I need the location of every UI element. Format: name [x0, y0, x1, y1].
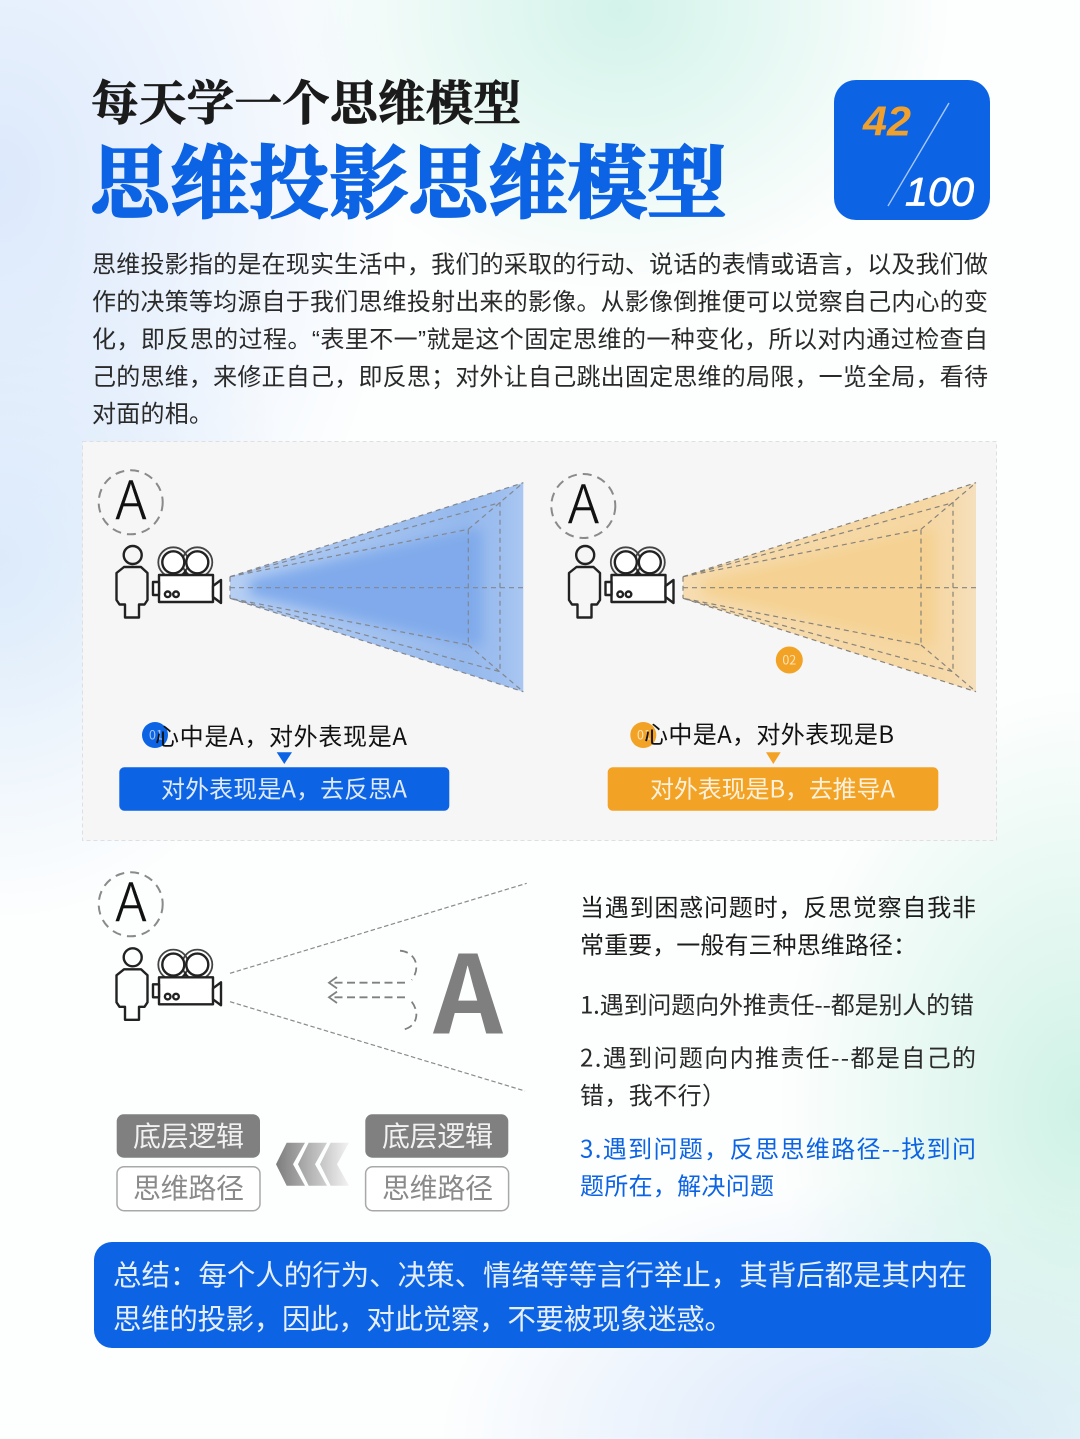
badge: 42 of 100 — [834, 80, 990, 220]
icon: person with camera right — [569, 546, 674, 618]
icon: person with camera left — [116, 546, 221, 618]
arrows: reflected back — [329, 951, 416, 1030]
icon: idea A bubble lower — [99, 861, 163, 937]
text block: introduction: 己的思维，来修正自己，即反思；对外让自己跳出固定思维的局限，一览全局，看待 — [92, 357, 988, 392]
chart: orange projection cone — [683, 483, 976, 692]
arrow: triple chevron — [276, 1143, 349, 1186]
caption: orange column: 01 — [637, 724, 651, 744]
tag group: left logic and path — [117, 1114, 260, 1211]
badge: 02: 02 — [782, 650, 796, 668]
badge: 02 — [776, 646, 803, 674]
panel: summary — [94, 1242, 991, 1348]
icon: idea A bubble right: A — [568, 463, 599, 539]
icon: idea A bubble left — [99, 459, 163, 535]
text block: three thinking paths: 题所在，解决问题 — [580, 1166, 774, 1202]
badge: 42 of 100: 100 — [905, 170, 974, 214]
callout: blue reflect A: 对外表现是A，去反思A — [161, 770, 407, 804]
tag group: right logic and path: 思维路径 — [382, 1167, 493, 1207]
diagram: reflecting back — [99, 861, 527, 1091]
arrow: orange down — [766, 752, 781, 764]
badge: 42 of 100: 42 — [862, 98, 911, 144]
panel: summary: 思维的投影，因此，对此觉察，不要被现象迷惑。 — [113, 1297, 733, 1338]
text block: three thinking paths: 3.遇到问题，反思思维路径--找到问 — [580, 1130, 976, 1164]
text block: three thinking paths — [580, 888, 976, 1202]
caption: blue column: 心中是A，对外表现是A — [155, 717, 407, 752]
icon: idea A bubble left: A — [115, 459, 147, 535]
caption: blue column: 01 — [149, 724, 163, 744]
text block: introduction — [92, 244, 988, 429]
caption: orange column: 心中是A，对外表现是B — [644, 715, 894, 750]
tag group: right logic and path — [365, 1114, 509, 1211]
icon: idea A bubble lower: A — [115, 861, 147, 937]
tag group: left logic and path: 底层逻辑 — [133, 1115, 244, 1155]
text block: introduction: 思维投影指的是在现实生活中，我们的采取的行动、说话的表情或语言，以及我们做 — [92, 244, 988, 280]
text block: three thinking paths: 当遇到困惑问题时，反思觉察自我非 — [580, 888, 976, 923]
text block: introduction: 化，即反思的过程。“表里不一”就是这个固定思维的一种变化，所以对内通过检查自 — [92, 320, 988, 354]
tag group: left logic and path: 思维路径 — [133, 1167, 244, 1207]
callout: blue reflect A — [119, 767, 449, 811]
title: daily thinking model: 每天学一个思维模型 — [91, 65, 521, 134]
text block: introduction: 对面的相。 — [92, 394, 213, 429]
tag group: right logic and path: 底层逻辑 — [382, 1115, 493, 1155]
projection lines — [230, 883, 527, 1091]
heading: thinking projection model: 思维投影思维模型 — [90, 120, 726, 234]
arrow: blue down — [277, 752, 292, 764]
text block: three thinking paths: 常重要，一般有三种思维路径： — [580, 926, 917, 960]
icon: idea A bubble right — [551, 463, 615, 539]
text block: introduction: 作的决策等均源自于我们思维投射出来的影像。从影像倒推便可以觉察自己内心的变 — [92, 282, 988, 317]
callout: orange infer A: 对外表现是B，去推导A — [650, 770, 895, 804]
panel: summary: 总结：每个人的行为、决策、情绪等等言行举止，其背后都是其内在 — [113, 1253, 967, 1294]
icon: person with camera lower — [116, 948, 221, 1020]
text block: three thinking paths: 1.遇到问题向外推责任--都是别人的错 — [580, 986, 974, 1020]
callout: orange infer A — [608, 767, 938, 811]
text block: three thinking paths: 错，我不行） — [580, 1076, 726, 1111]
chart: blue projection cone — [230, 483, 523, 692]
panel: two projection comparison — [82, 442, 996, 840]
large letter A: A — [432, 910, 503, 1066]
text block: three thinking paths: 2.遇到问题向内推责任--都是自己的 — [580, 1038, 976, 1074]
